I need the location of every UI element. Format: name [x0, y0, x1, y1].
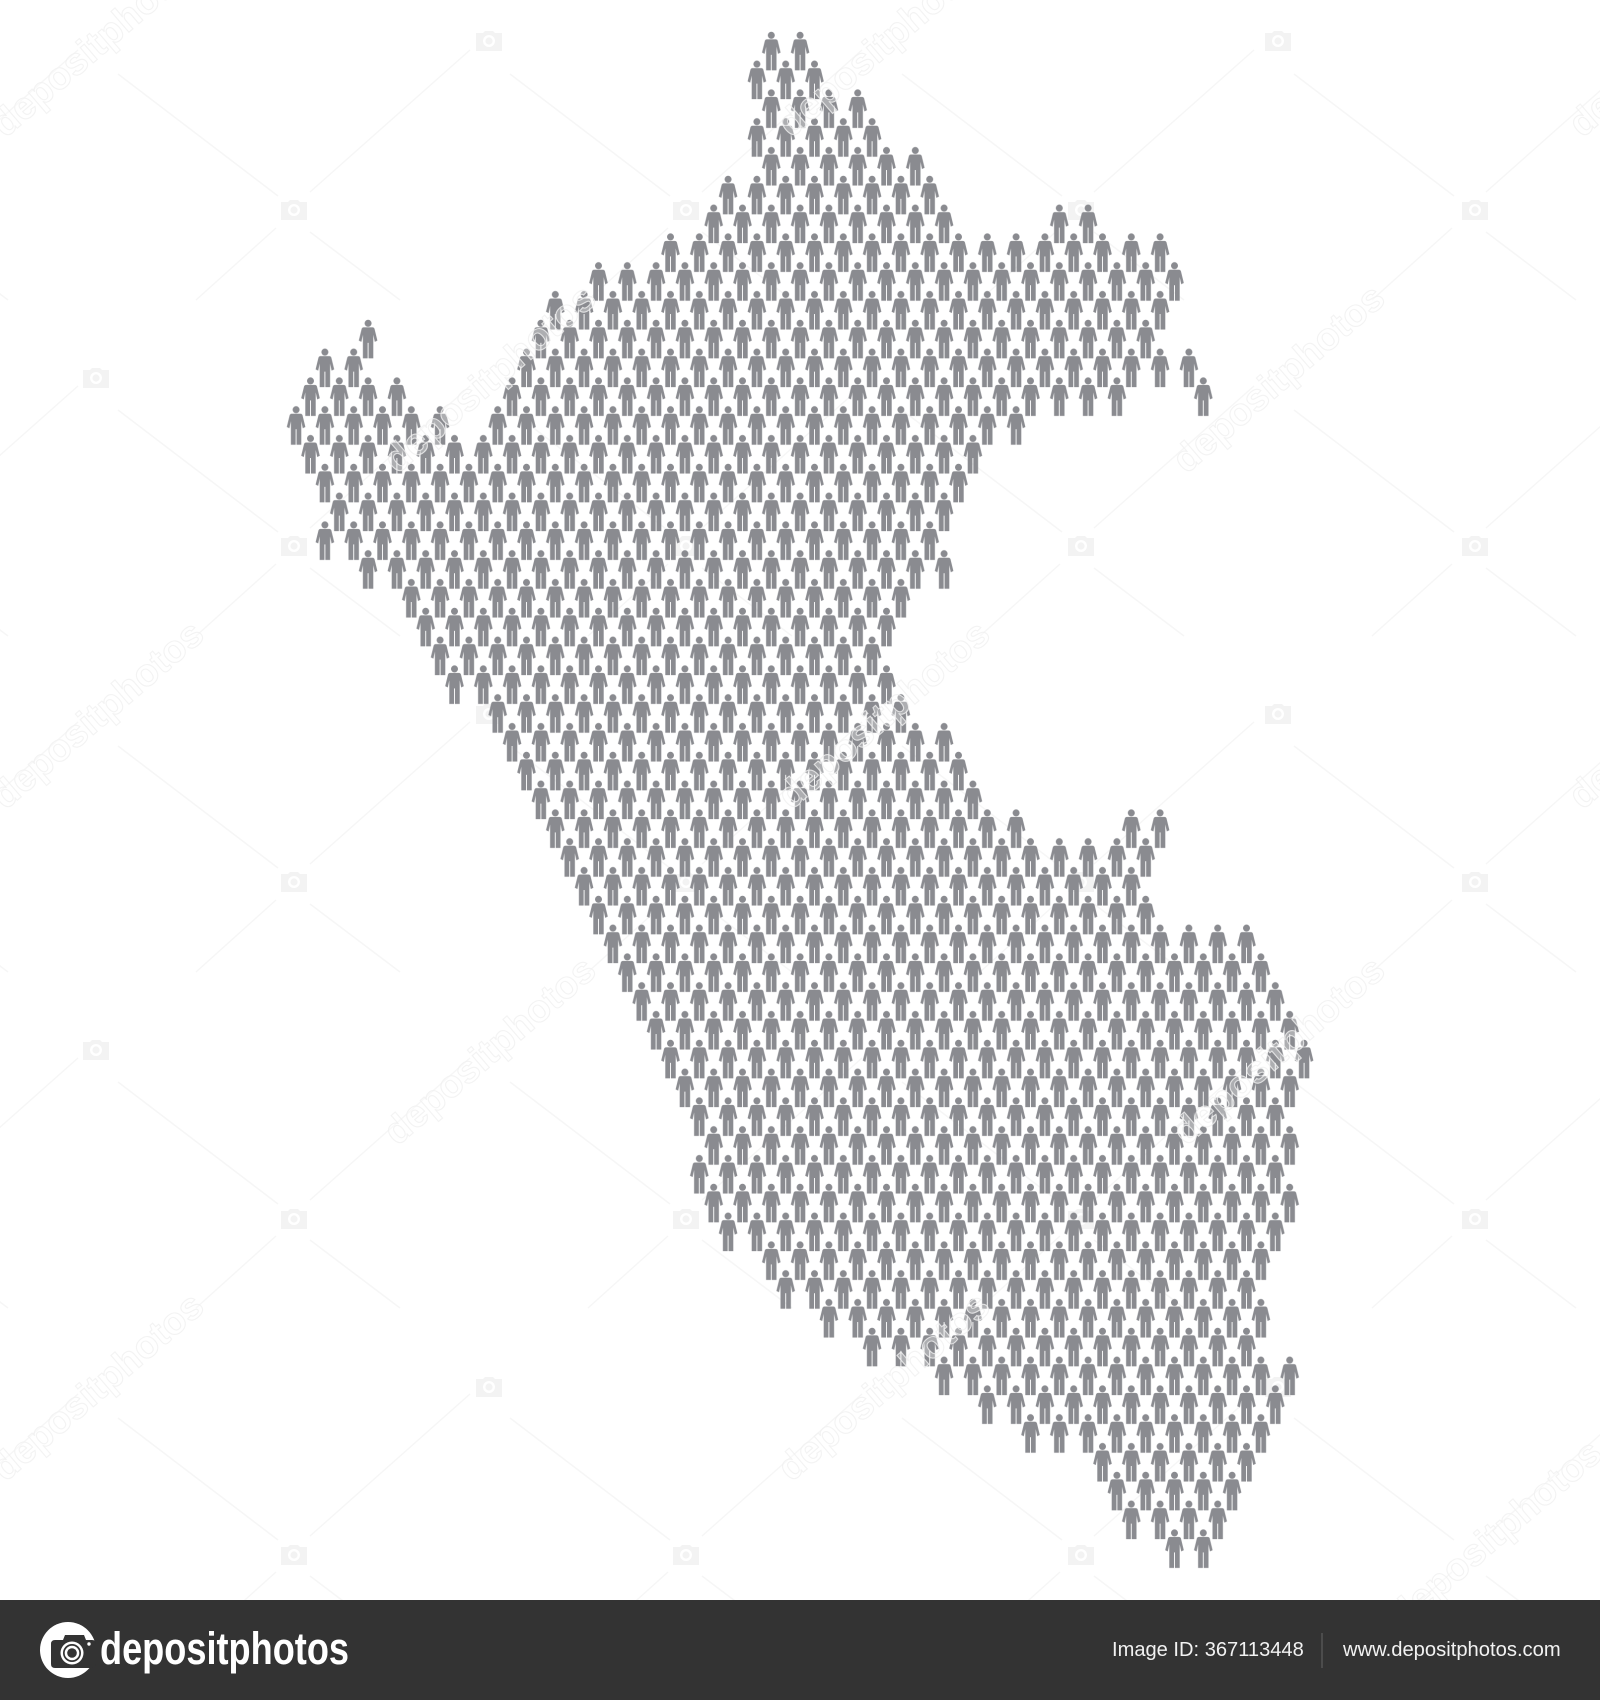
footer bar	[0, 1600, 1600, 1700]
diagonal depositphotos watermarks: depositphotos	[376, 949, 604, 1153]
image id: Image ID: 367113448	[1112, 1639, 1304, 1661]
diagonal depositphotos watermarks: depositphotos	[770, 613, 998, 817]
website url: www.depositphotos.com	[1342, 1639, 1561, 1661]
diagonal depositphotos watermarks: depositphotos	[770, 1285, 998, 1489]
watermark camera icons	[83, 31, 1488, 1565]
icon: camera logo	[40, 1622, 96, 1678]
logo wordmark: depositphotos	[100, 1623, 349, 1674]
diagonal depositphotos watermarks: depositphotos	[1165, 949, 1393, 1153]
person-icon map of Peru	[282, 30, 1318, 1570]
diagonal depositphotos watermarks: depositphotos	[376, 277, 604, 481]
diagonal depositphotos watermarks: depositphotos	[1165, 277, 1393, 481]
